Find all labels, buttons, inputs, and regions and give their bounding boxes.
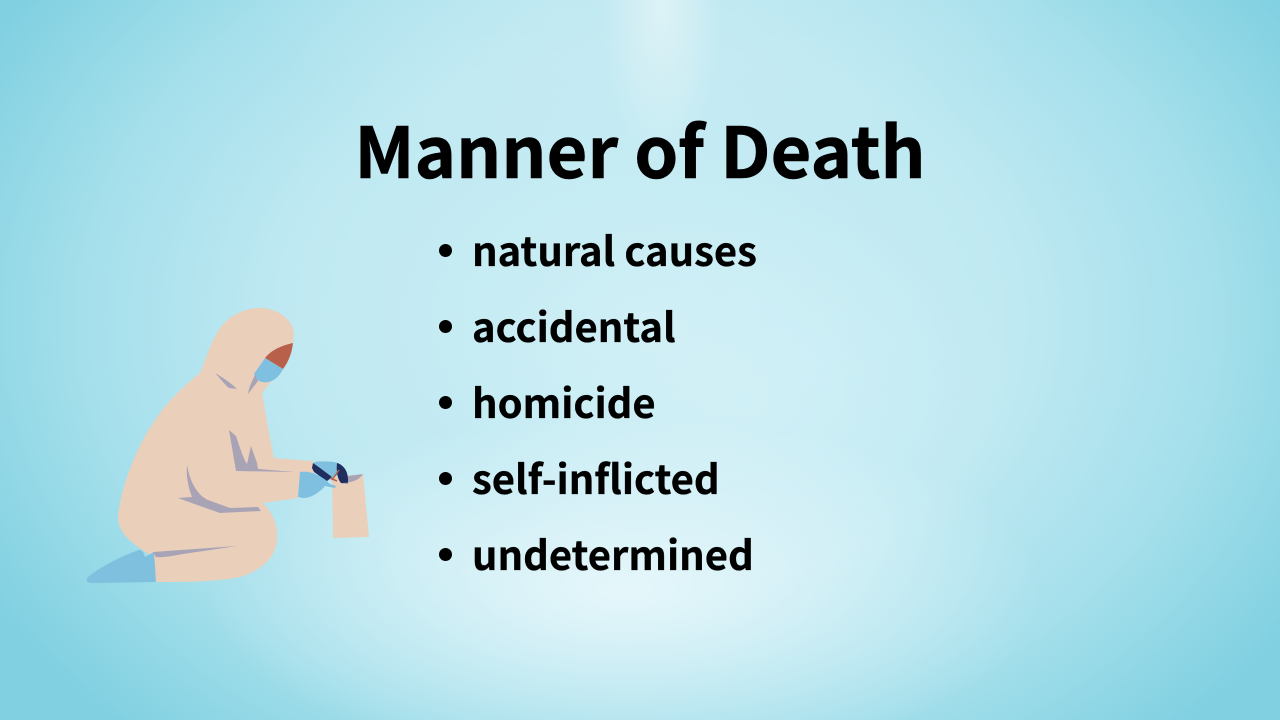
bullet: natural causes: natural causes	[472, 220, 757, 278]
chest fold shadow	[229, 430, 295, 472]
collar fold shadow	[248, 375, 258, 394]
leg fold shadow	[153, 546, 237, 557]
evidence bag	[332, 474, 369, 538]
shoe	[87, 550, 156, 583]
bullet list: manners of death	[439, 220, 757, 582]
face visor	[265, 343, 293, 369]
face mask	[254, 358, 283, 382]
shoulder fold	[215, 373, 237, 389]
far glove	[313, 461, 338, 482]
dark glove cuff	[337, 463, 348, 484]
waist fold shadow	[178, 465, 261, 513]
tool in hand	[312, 463, 332, 481]
title: Manner of Death	[354, 97, 926, 199]
bag opening	[341, 474, 363, 484]
bullet: homicide: homicide	[472, 372, 656, 430]
bullet: undetermined: undetermined	[472, 524, 754, 582]
bullet: accidental: accidental	[472, 296, 676, 354]
protective suit body	[118, 308, 314, 582]
bullet: self-inflicted: self-inflicted	[472, 448, 720, 506]
near glove	[298, 472, 336, 498]
forceps	[330, 470, 339, 481]
